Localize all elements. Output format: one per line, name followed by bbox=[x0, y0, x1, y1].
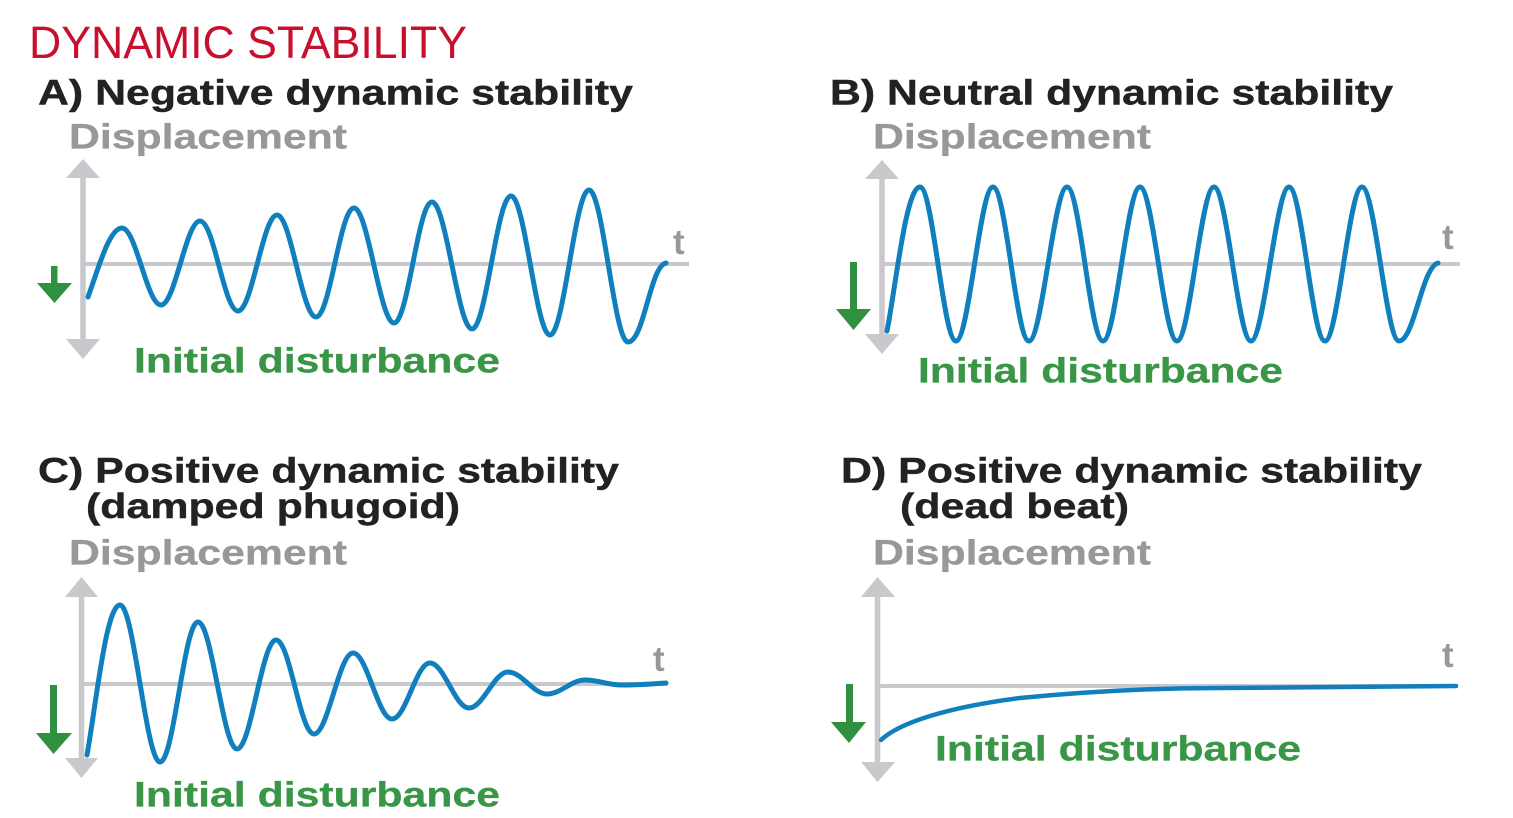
subheading C: (damped phugoid) bbox=[86, 487, 460, 526]
wave B bbox=[887, 187, 1438, 341]
curve D bbox=[881, 686, 1456, 740]
wave C bbox=[87, 605, 666, 762]
axes A bbox=[66, 159, 689, 359]
panel: D dead beat bbox=[831, 452, 1458, 782]
heading A: A) Negative dynamic stability bbox=[38, 74, 634, 112]
panel: B neutral dynamic stability bbox=[830, 74, 1460, 390]
axes D bbox=[861, 577, 1458, 782]
heading C: C) Positive dynamic stability bbox=[38, 452, 620, 490]
wave A bbox=[88, 190, 666, 342]
axis label C: Displacement bbox=[69, 533, 347, 572]
t label C: t bbox=[653, 640, 665, 679]
initial disturbance A: Initial disturbance bbox=[134, 342, 500, 380]
green arrow C bbox=[36, 685, 72, 754]
t label D: t bbox=[1442, 636, 1454, 675]
heading B: B) Neutral dynamic stability bbox=[830, 74, 1394, 112]
title: DYNAMIC STABILITY bbox=[29, 17, 467, 68]
t label A: t bbox=[673, 223, 685, 262]
green arrow B bbox=[836, 262, 871, 330]
heading D: D) Positive dynamic stability bbox=[841, 452, 1423, 490]
axis label A: Displacement bbox=[69, 117, 347, 156]
green arrow A bbox=[37, 266, 72, 303]
initial disturbance D: Initial disturbance bbox=[935, 730, 1301, 768]
initial disturbance B: Initial disturbance bbox=[918, 352, 1283, 390]
axes C bbox=[65, 577, 668, 778]
panel: C damped phugoid bbox=[36, 452, 668, 814]
panel: A negative dynamic stability bbox=[37, 74, 689, 380]
subheading D: (dead beat) bbox=[900, 487, 1129, 526]
green arrow D bbox=[831, 684, 866, 743]
axis label D: Displacement bbox=[873, 533, 1151, 572]
axis label B: Displacement bbox=[873, 117, 1151, 156]
axes B bbox=[865, 160, 1460, 354]
initial disturbance C: Initial disturbance bbox=[134, 776, 500, 814]
t label B: t bbox=[1442, 218, 1454, 257]
